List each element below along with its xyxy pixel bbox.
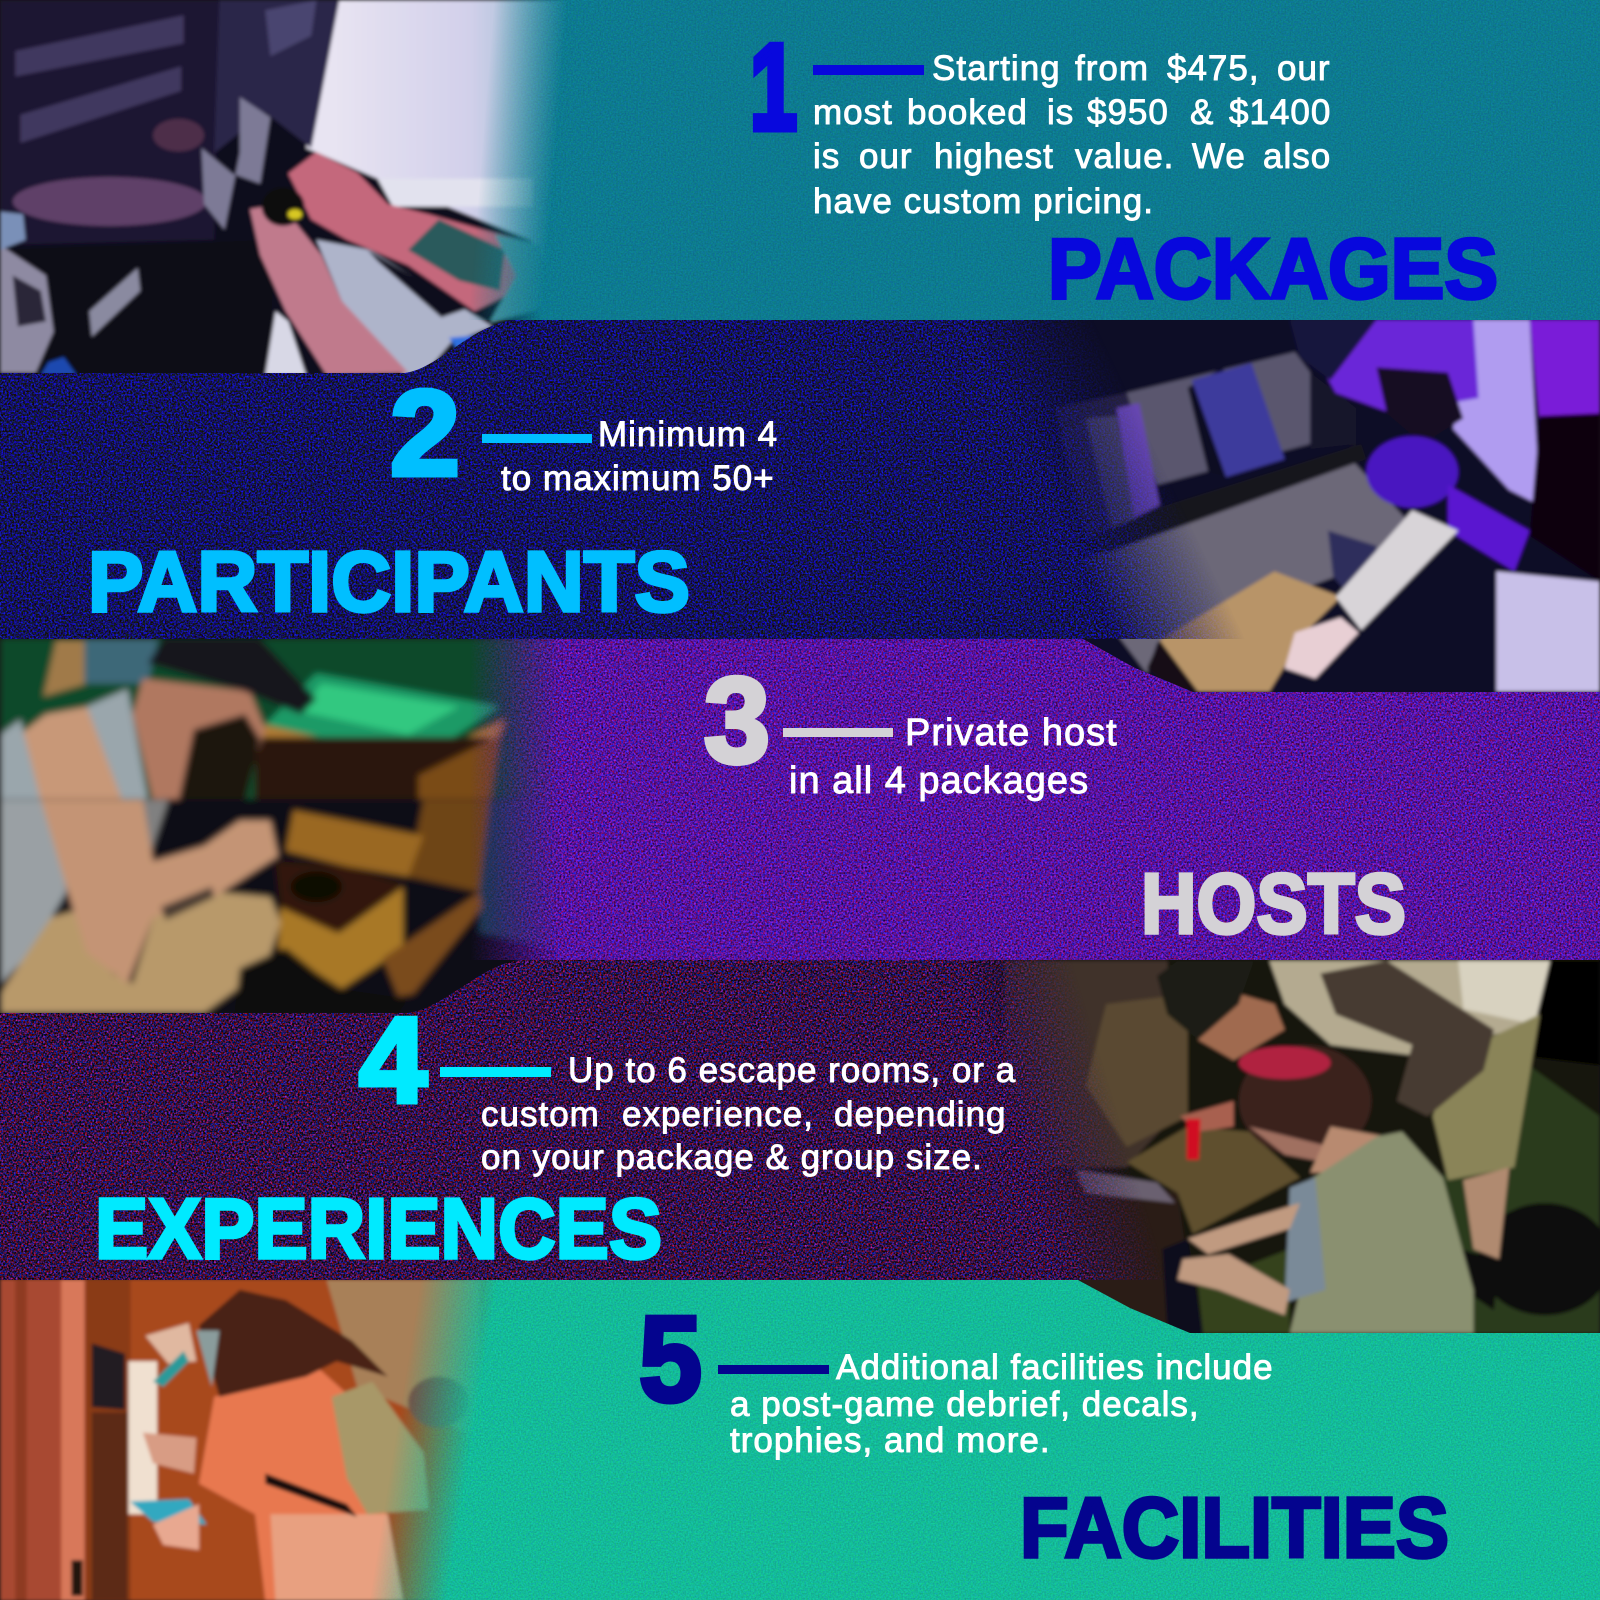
text: packages description: value. bbox=[1075, 137, 1174, 176]
text: participants description: to maximum 50+ bbox=[501, 459, 775, 498]
photo: woman with a backpack and flashlight at a wall lockbox bbox=[0, 1279, 510, 1600]
numeral 4: 4 bbox=[359, 992, 427, 1128]
text: packages description: also bbox=[1263, 137, 1331, 176]
text: packages description: $1400 bbox=[1229, 93, 1331, 132]
text: hosts description: in all 4 packages bbox=[789, 760, 1089, 802]
text: packages description: We bbox=[1192, 137, 1246, 176]
heading: EXPERIENCES: EXPERIENCES bbox=[95, 1182, 662, 1277]
panel: participants content bbox=[88, 365, 778, 630]
text: hosts description: Private host bbox=[905, 712, 1118, 754]
text: packages description: is bbox=[1047, 93, 1074, 132]
panel: experiences content bbox=[95, 992, 1016, 1277]
photo: man inspecting a shelf under ultraviolet light bbox=[953, 311, 1600, 694]
text: packages description: from bbox=[1075, 49, 1149, 88]
text: packages description: is bbox=[813, 137, 840, 176]
panel: packages content bbox=[750, 19, 1498, 317]
text: packages description: have custom pricing. bbox=[813, 182, 1154, 221]
band: packages teal background bbox=[472, 0, 1600, 320]
panel: facilities content bbox=[639, 1291, 1449, 1576]
heading: PARTICIPANTS: PARTICIPANTS bbox=[88, 535, 690, 630]
text: packages description: highest bbox=[934, 137, 1054, 176]
band: hosts purple background bbox=[474, 639, 1600, 960]
text: packages description: $950 bbox=[1087, 93, 1169, 132]
numeral 3: 3 bbox=[704, 652, 770, 788]
text: packages description: Starting bbox=[932, 49, 1061, 88]
text: experiences description: Up to 6 escape rooms, or a bbox=[568, 1051, 1016, 1090]
text: facilities description: a post-game debrief, decals, bbox=[730, 1385, 1200, 1424]
text: packages description: & bbox=[1190, 93, 1214, 132]
text: packages description: booked bbox=[907, 93, 1028, 132]
text: facilities description: Additional facilities include bbox=[836, 1348, 1274, 1387]
panel: hosts content bbox=[704, 652, 1406, 952]
heading: PACKAGES: PACKAGES bbox=[1048, 222, 1498, 317]
numeral 1: 1 bbox=[750, 19, 797, 155]
band: facilities green background bbox=[373, 1280, 1600, 1600]
photo: hands picking a lock on a locker bbox=[0, 0, 602, 380]
text: packages description: our bbox=[859, 137, 913, 176]
band: participants navy background bbox=[0, 320, 1239, 639]
numeral 5: 5 bbox=[639, 1291, 702, 1427]
text: facilities description: trophies, and more. bbox=[730, 1421, 1051, 1460]
divider: experiences bbox=[440, 1067, 551, 1077]
divider: packages bbox=[813, 65, 924, 75]
text: participants description: Minimum 4 bbox=[598, 415, 778, 454]
divider: participants bbox=[482, 434, 592, 443]
text: packages description: $475, bbox=[1167, 49, 1260, 88]
heading: FACILITIES: FACILITIES bbox=[1020, 1481, 1449, 1576]
photo: two players opening a chest with a red flashlight bbox=[1004, 958, 1600, 1336]
text: packages description: our bbox=[1277, 49, 1331, 88]
text: experiences description: experience, bbox=[622, 1095, 814, 1134]
text: experiences description: custom bbox=[481, 1095, 600, 1134]
text: experiences description: depending bbox=[834, 1095, 1006, 1134]
text: experiences description: on your package & group size. bbox=[481, 1138, 983, 1177]
heading: HOSTS: HOSTS bbox=[1141, 857, 1406, 952]
photo: man searching a wooden cabinet with a maze lid bbox=[0, 638, 587, 1016]
divider: hosts bbox=[783, 728, 893, 737]
divider: facilities bbox=[718, 1365, 829, 1374]
numeral 2: 2 bbox=[390, 365, 460, 501]
band: experiences plum background bbox=[0, 960, 1160, 1280]
text: packages description: most bbox=[813, 93, 893, 132]
